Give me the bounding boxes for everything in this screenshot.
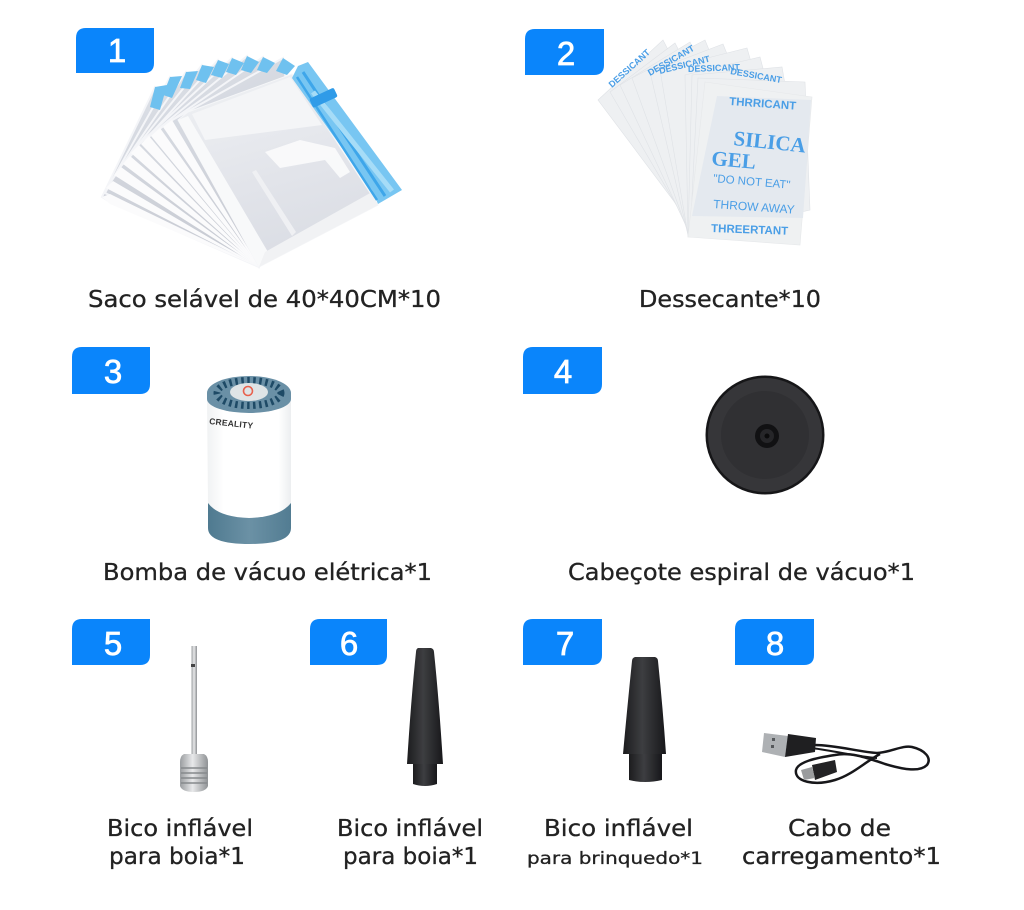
badge 3: 3 (104, 353, 122, 390)
badge 5 (72, 619, 150, 665)
label: pump: Bomba de vácuo elétrica*1 (103, 560, 432, 586)
icon: silica gel packets: GEL (711, 146, 757, 174)
label: needle: para boia*1 (109, 844, 245, 870)
badge 7: 7 (556, 625, 574, 662)
badge 4 (523, 347, 602, 394)
badge 4: 4 (554, 353, 572, 390)
icon: vacuum pump (207, 376, 291, 544)
icon: USB cable (762, 733, 929, 783)
badge 6: 6 (340, 625, 358, 662)
label: nozzle: para boia*1 (343, 844, 478, 870)
icon: black disc head (706, 376, 824, 494)
panel: item 8 charging cable (735, 619, 941, 870)
label: cable: Cabo de (788, 816, 891, 842)
panel: item 4 spiral vacuum head (523, 347, 915, 586)
badge 8: 8 (766, 625, 784, 662)
badge 6 (310, 619, 387, 665)
label: cable: carregamento*1 (742, 844, 941, 870)
badge 2 (525, 29, 604, 75)
label: toy nozzle: para brinquedo*1 (527, 849, 703, 869)
badge 3 (72, 347, 150, 394)
label: needle (107, 816, 253, 870)
icon: short black nozzle (623, 657, 666, 782)
panel: item 3 electric pump (72, 347, 432, 586)
icon: silica gel packets (598, 40, 812, 245)
icon: metal needle (180, 646, 208, 792)
label: toy nozzle (527, 816, 703, 869)
icon: silica gel packets: DESSICANT (607, 47, 652, 89)
icon: silica gel packets: "DO NOT EAT" (713, 173, 791, 192)
panel: item 7 toy nozzle (523, 619, 703, 869)
panel: item 5 inflation needle (72, 619, 253, 870)
label: nozzle: Bico inflável (337, 816, 483, 842)
label: desiccant: Dessecante*10 (639, 287, 821, 313)
icon: silica gel packets: THRRICANT (729, 96, 797, 113)
label: bag: Saco selável de 40*40CM*10 (88, 287, 441, 313)
panel: item 6 float nozzle (310, 619, 483, 870)
panel: item 1 resealable bags (76, 28, 441, 313)
badge 2: 2 (557, 35, 575, 72)
icon: vacuum pump: CREALITY (209, 416, 254, 431)
badge 8 (735, 619, 814, 665)
label: toy nozzle: Bico inflável (544, 816, 693, 842)
badge 1 (76, 28, 154, 73)
badge 1: 1 (108, 32, 126, 69)
icon: silica gel packets: DESSICANT (688, 62, 741, 74)
panel: item 2 desiccant (525, 29, 821, 313)
icon: silica gel packets: THROW AWAY (713, 197, 795, 217)
badge 7 (523, 619, 602, 665)
icon: silica gel packets: DESSICANT (730, 66, 783, 85)
badge 5: 5 (104, 625, 122, 662)
label: cable (742, 816, 941, 870)
icon: silica gel packets: SILICA (732, 126, 808, 158)
icon: silica gel packets: DESSICANT (646, 43, 696, 78)
label: needle: Bico inflável (107, 816, 253, 842)
icon: silica gel packets: THREERTANT (711, 223, 788, 238)
icon: black nozzle (407, 648, 443, 786)
icon: silica gel packets: DESSICANT (658, 54, 711, 76)
label: head: Cabeçote espiral de vácuo*1 (568, 560, 915, 586)
icon: fan of vacuum bags (102, 56, 402, 267)
label: nozzle (337, 816, 483, 870)
